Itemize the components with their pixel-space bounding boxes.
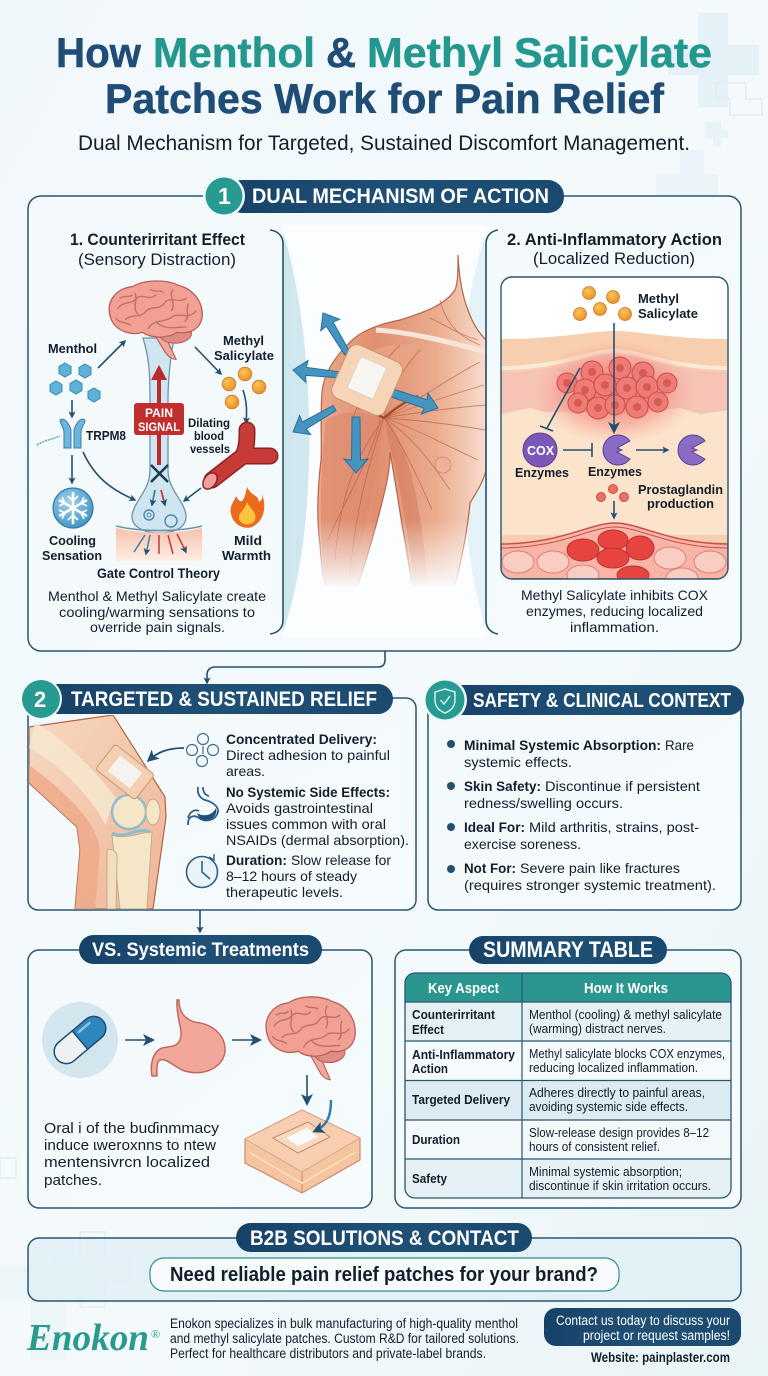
synapse interior	[144, 490, 177, 527]
row: duration: Duration	[412, 1132, 460, 1147]
label: methyl salicylate: Salicylate	[638, 307, 698, 321]
row: anti-inflammatory action: reducing localized inflammation.	[529, 1061, 698, 1075]
text: duration: Slow release for	[291, 852, 391, 868]
heading: section 1: DUAL MECHANISM OF ACTION	[252, 185, 549, 208]
counterirritant heading: (Sensory Distraction)	[78, 250, 236, 269]
arrow: vessel to gate	[184, 488, 201, 501]
row: counterirritant effect: (warming) distract nerves.	[529, 1022, 666, 1036]
row: targeted delivery	[412, 1086, 705, 1114]
row: duration: Slow-release design provides 8–12	[529, 1126, 709, 1140]
shaded lens behind shoulder	[283, 232, 487, 632]
anti-inflammatory caption: inflammation.	[570, 619, 659, 635]
comparison text: Oral i⁠ of the buɗinmmacy	[44, 1120, 220, 1137]
row: targeted delivery: avoiding systemic side effects.	[529, 1100, 688, 1114]
icon: menthol molecules	[50, 363, 100, 402]
pain signal label: PAIN	[145, 408, 173, 420]
bullet: not for: (requires stronger systemic treatment).	[464, 877, 716, 893]
title: How	[56, 29, 141, 76]
label: menthol: Menthol	[48, 341, 97, 356]
heading: section 1: 1	[218, 183, 231, 209]
label: methyl salicylate: Salicylate	[214, 348, 274, 363]
bullet: skin safety: Skin Safety:	[464, 778, 541, 794]
arrow: down	[344, 417, 368, 473]
panel: B2B solutions and contact	[28, 1223, 741, 1301]
inhibition arrow	[563, 443, 592, 457]
label: mild warmth	[222, 533, 271, 563]
anti-inflammatory heading: 2. Anti-Inflammatory Action	[507, 231, 722, 249]
heading: section 2	[20, 678, 393, 720]
row: counterirritant effect	[412, 1007, 722, 1037]
arrow: left	[292, 359, 341, 386]
icon: enzyme pacman center	[603, 435, 630, 465]
row: anti-inflammatory action: Methyl salicylate blocks COX enzymes,	[529, 1047, 725, 1061]
bullet: skin safety: redness/swelling occurs.	[464, 795, 623, 811]
counterirritant caption	[48, 588, 266, 635]
bullet: not for: Severe pain like fractures	[520, 860, 680, 876]
skin layers	[501, 331, 728, 588]
comparison text: induce ɩweroxnns to ntew	[44, 1137, 216, 1154]
arrow: menthol to brain	[98, 341, 125, 368]
arrow: brain to patch	[306, 1075, 308, 1103]
counterirritant column	[37, 230, 283, 635]
bullet: not for	[447, 860, 716, 893]
counterirritant caption: cooling/warming sensations to	[59, 604, 255, 620]
skin receptor patch	[116, 526, 202, 561]
text: concentrated delivery	[226, 731, 390, 779]
heading: summary table: SUMMARY TABLE	[483, 937, 653, 962]
company description: Perfect for healthcare distributors and private-label brands.	[170, 1346, 486, 1361]
anti-inflammatory caption: enzymes, reducing localized	[526, 603, 703, 619]
label: methyl salicylate	[214, 333, 274, 363]
title: Menthol	[153, 29, 315, 76]
icon: salicylate molecules	[574, 286, 632, 320]
call to action pill: Need reliable pain relief patches for your brand?	[170, 1264, 598, 1286]
panel: vs systemic treatments	[28, 935, 372, 1208]
subtitle: Dual Mechanism for Targeted, Sustained Discomfort Management.	[78, 132, 690, 155]
bullet: ideal for: Mild arthritis, strains, post-	[529, 819, 699, 835]
title: Methyl	[367, 29, 503, 76]
row: safety: discontinue if skin irritation occurs.	[529, 1179, 711, 1193]
label: methyl salicylate: Methyl	[638, 292, 679, 306]
icon: salicylate molecules	[222, 367, 266, 409]
anti-inflammatory heading	[507, 231, 722, 268]
counterirritant caption: override pain signals.	[90, 619, 225, 635]
arrow: up left	[314, 307, 357, 359]
row: anti-inflammatory action: Anti-Inflammatory	[412, 1047, 516, 1062]
shoulder illustration	[288, 255, 486, 585]
bullet: not for: Not For:	[464, 860, 516, 876]
company description: and methyl salicylate patches. Custom R&D for tailored solutions.	[170, 1331, 519, 1346]
text: duration: therapeutic levels.	[226, 884, 343, 900]
icon: blood vessel	[200, 430, 270, 492]
counterirritant heading	[70, 231, 245, 269]
row: safety: Minimal systemic absorption;	[529, 1165, 682, 1179]
arrow: to enzyme	[613, 323, 615, 431]
company description	[170, 1316, 519, 1361]
label: TRPM8: TRPM8	[86, 429, 126, 443]
row: safety	[412, 1165, 711, 1193]
label: prostaglandin production	[638, 483, 723, 511]
anti-inflammatory column	[486, 230, 728, 635]
arrow: lower left	[288, 398, 340, 442]
row: duration: hours of consistent relief.	[529, 1140, 660, 1154]
bullet: ideal for: Ideal For:	[464, 819, 525, 835]
panel: targeted and sustained relief	[20, 678, 416, 910]
label: prostaglandin production: production	[647, 497, 714, 511]
text: duration	[226, 852, 391, 900]
label: cooling sensation: Cooling	[49, 533, 96, 548]
label: dilating blood vessels: vessels	[190, 442, 230, 456]
text: duration: 8–12 hours of steady	[226, 868, 357, 884]
row: anti-inflammatory action: Action	[412, 1061, 448, 1076]
logo: Enokon: Enokon	[26, 1317, 149, 1359]
row: targeted delivery: Targeted Delivery	[412, 1092, 511, 1107]
row: targeted delivery: Adheres directly to painful areas,	[529, 1086, 705, 1100]
contact callout: Contact us today to discuss your	[556, 1313, 730, 1328]
row: duration	[412, 1126, 709, 1154]
logo: Enokon: ®	[151, 1327, 160, 1341]
text: concentrated delivery: areas.	[226, 763, 265, 779]
bullet: ideal for	[447, 819, 699, 852]
bullet: ideal for: exercise soreness.	[464, 836, 581, 852]
table header: Key Aspect	[428, 981, 499, 997]
inhibition line to COX	[540, 368, 580, 431]
bullet: skin safety	[447, 778, 700, 811]
arrow: stomach to brain	[232, 1039, 259, 1041]
pain signal arrow	[151, 365, 167, 465]
heading: safety	[423, 678, 744, 722]
row: counterirritant effect: Counterirritant	[412, 1007, 496, 1022]
label: methyl salicylate	[638, 292, 698, 321]
pain signal label	[134, 403, 184, 435]
contact callout: project or request samples!	[583, 1328, 730, 1343]
anti-inflammatory caption	[521, 587, 709, 635]
anti-inflammatory caption: Methyl Salicylate inhibits COX	[521, 587, 709, 603]
text: no systemic side effects	[226, 784, 409, 848]
icon: enzyme pacman right	[678, 435, 705, 465]
label: cooling sensation	[42, 533, 102, 563]
heading: vs systemic treatments: VS. Systemic Treatments	[92, 939, 309, 961]
bullet: minimal systemic absorption: Minimal Systemic Absorption:	[464, 737, 661, 753]
icon: prostaglandin dots	[596, 484, 628, 502]
summary table grid	[405, 973, 731, 1198]
gate block X	[151, 465, 168, 482]
label: dilating blood vessels: blood	[194, 429, 224, 443]
label: enzymes center: Enzymes	[588, 464, 642, 479]
row: counterirritant effect: Menthol (cooling) & methyl salicylate	[529, 1008, 722, 1022]
icon: flame	[231, 487, 264, 528]
bracket left column	[270, 230, 283, 634]
text: no systemic side effects: NSAIDs (dermal absorption).	[226, 832, 409, 848]
icon: COX enzyme	[523, 433, 557, 467]
label: methyl salicylate: Methyl	[223, 333, 264, 348]
arrow: to knee patch	[149, 748, 184, 760]
title: Patches Work for Pain Relief	[105, 75, 665, 122]
arrow: to second enzyme	[636, 449, 668, 451]
row: counterirritant effect: Effect	[412, 1022, 445, 1037]
arrow: salicylate to vessel	[243, 390, 247, 423]
comparison text: patches.	[44, 1172, 102, 1189]
text: duration: Duration:	[226, 852, 287, 868]
arrow: TRPM8 to cooling	[71, 455, 73, 483]
company description: Enokon specializes in bulk manufacturing of high-quality menthol	[170, 1316, 518, 1331]
inflammation diagram	[501, 277, 728, 588]
arrow: TRPM8 to gate	[83, 452, 135, 500]
bullet: minimal systemic absorption	[447, 737, 694, 770]
heading: section 1	[203, 175, 564, 217]
pain signal label: SIGNAL	[138, 422, 180, 434]
text: no systemic side effects: No Systemic Side Effects:	[226, 784, 390, 800]
icon: skin block with patch	[245, 1100, 360, 1193]
brain	[109, 281, 202, 359]
bright centre behind shoulder	[283, 225, 487, 637]
arrow: capsule to stomach	[125, 1039, 152, 1041]
bullet: skin safety: Discontinue if persistent	[545, 778, 700, 794]
text: no systemic side effects: issues common with oral	[226, 816, 386, 832]
bullet: minimal systemic absorption: Rare	[665, 737, 694, 753]
label: mild warmth: Mild	[234, 533, 262, 548]
call to action pill	[150, 1258, 619, 1291]
icon: TRPM8 channel	[37, 419, 85, 448]
label: mild warmth: Warmth	[222, 548, 271, 563]
counterirritant caption: Menthol & Methyl Salicylate create	[48, 588, 266, 604]
row: anti-inflammatory action	[412, 1047, 725, 1076]
comparison text: mentensivrcn localized	[44, 1154, 210, 1171]
icon: COX enzyme: COX	[527, 443, 554, 458]
anti-inflammatory heading: (Localized Reduction)	[533, 249, 695, 268]
bracket right column	[486, 230, 498, 634]
website: Website: painplaster.com	[591, 1350, 730, 1365]
title	[56, 29, 712, 122]
label: dilating blood vessels	[188, 416, 230, 456]
patch on shoulder	[329, 342, 405, 418]
icon: brain	[266, 997, 355, 1080]
title: Salicylate	[514, 29, 712, 76]
heading: section 2: TARGETED & SUSTAINED RELIEF	[71, 688, 377, 711]
arrow: right	[379, 380, 441, 418]
icon: stomach	[188, 787, 218, 825]
icon: snowflake	[53, 488, 93, 528]
arrow: menthol to TRPM8	[71, 400, 73, 417]
text: concentrated delivery: Direct adhesion to painful	[226, 747, 390, 763]
table header	[428, 981, 668, 997]
title: &	[326, 29, 356, 76]
row: safety: Safety	[412, 1171, 448, 1186]
label: gate control theory: Gate Control Theory	[97, 566, 220, 581]
icon: stomach	[151, 1000, 225, 1076]
label: prostaglandin production: Prostaglandin	[638, 483, 723, 497]
connector arrow: section 1 to section 2	[207, 651, 385, 683]
shoulder muscles	[318, 255, 486, 585]
bullet: minimal systemic absorption: systemic effects.	[464, 754, 572, 770]
connector arrow: section 2 to comparison	[199, 910, 201, 932]
icon: concentrated delivery	[186, 734, 218, 766]
panel: safety and clinical context	[423, 678, 744, 910]
label: cooling sensation: Sensation	[42, 548, 102, 563]
text: concentrated delivery: Concentrated Delivery:	[226, 731, 377, 747]
heading: B2B: B2B SOLUTIONS & CONTACT	[250, 1227, 519, 1250]
table header: How It Works	[584, 981, 668, 997]
icon: clock	[186, 854, 218, 888]
panel: dual mechanism of action	[28, 175, 741, 651]
panel: summary table	[395, 936, 741, 1208]
contact callout	[544, 1308, 741, 1346]
counterirritant heading: 1. Counterirritant Effect	[70, 231, 245, 249]
label: enzymes left: Enzymes	[515, 465, 569, 480]
icon: capsule	[42, 1002, 118, 1078]
arrow: prostaglandin down	[613, 501, 615, 518]
label: dilating blood vessels: Dilating	[188, 416, 230, 430]
comparison text	[44, 1120, 220, 1189]
spinal column and synapse	[132, 338, 186, 533]
arrow: brain to methyl salicylate	[195, 347, 221, 374]
heading: section 2: 2	[34, 687, 46, 712]
knee illustration	[29, 715, 166, 909]
text: no systemic side effects: Avoids gastrointestinal	[226, 800, 373, 816]
